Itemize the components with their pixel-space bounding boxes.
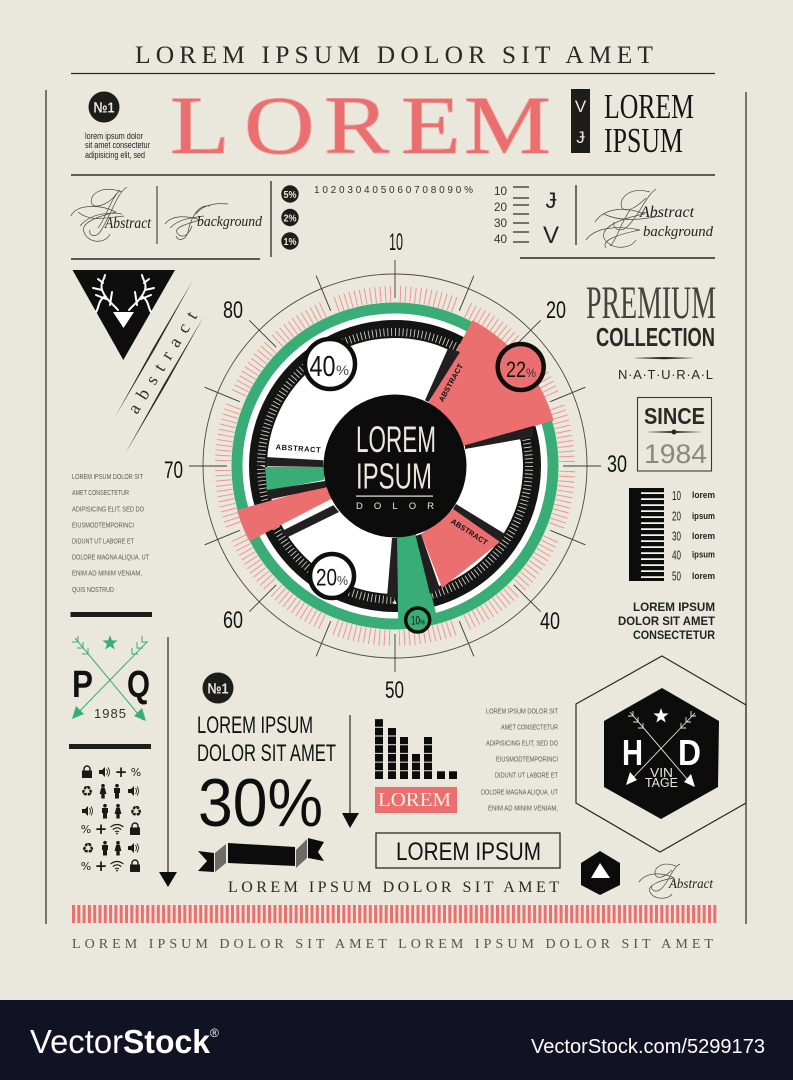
- percent badges: 1%: [284, 237, 297, 248]
- text block: lorem headline: DOLOR SIT AMET: [197, 740, 336, 767]
- barcode scale: 10: [672, 488, 681, 503]
- percent badge 40: 40: [310, 351, 336, 383]
- scale: 10 to 40: 10: [494, 184, 507, 198]
- script: abstract: [71, 187, 152, 241]
- boxed heading: [376, 833, 560, 868]
- center title: DOLOR: [356, 501, 434, 512]
- heading: lorem ipsum condensed serif: [604, 87, 694, 160]
- footer bar: VectorStock.com/5299173: [531, 1036, 765, 1058]
- frame lines: [46, 74, 746, 924]
- text block: right paragraph: ENIM AD MINIM VENIAM,: [488, 806, 558, 812]
- green segment left: [265, 467, 324, 491]
- scale: 10 to 40: 20: [494, 200, 507, 214]
- text block: lorem headline: LOREM IPSUM: [197, 712, 313, 739]
- dial labels: 60: [223, 607, 243, 634]
- heading: big lorem: LOREM: [170, 79, 551, 171]
- segment labels: ABSTRACT: [449, 517, 490, 547]
- badge: pq 1985: 1985: [94, 706, 126, 721]
- barcode scale: [629, 488, 715, 584]
- dial labels: 70: [164, 457, 183, 484]
- icon grid: %: [81, 860, 91, 873]
- divider bar left: [70, 612, 152, 617]
- percent badge 40: [305, 339, 355, 389]
- heading: big lorem: LOREM: [170, 79, 551, 171]
- icon grid: [81, 763, 142, 875]
- footer bar: Stock: [123, 1023, 211, 1060]
- text block: intro: lorem ipsum dolor: [85, 131, 143, 141]
- badge: pq 1985: P: [72, 664, 93, 706]
- heading: premium collection: N·A·T·U·R·A·L: [618, 367, 713, 382]
- percent badges: [281, 185, 299, 250]
- heading: lorem ipsum condensed serif: IPSUM: [604, 121, 683, 160]
- scale: 10 to 40: 30: [494, 216, 507, 230]
- pink tick ring: [223, 294, 567, 638]
- percent badge 20: [310, 554, 354, 598]
- percent badges: 5%: [284, 190, 297, 201]
- text block: right paragraph: EIUSMODTEMPORINCI: [496, 756, 558, 764]
- barcode scale: 50: [672, 568, 681, 584]
- stamp: since 1984: SINCE: [644, 403, 705, 429]
- ribbon: [198, 838, 324, 872]
- arrow: short down: [342, 715, 359, 828]
- badge: pq 1985: [72, 635, 150, 721]
- bar chart: [379, 719, 453, 779]
- icon grid: %: [81, 823, 91, 836]
- heading: lorem ipsum condensed serif: LOREM: [604, 87, 694, 126]
- barcode scale: lorem: [692, 571, 715, 581]
- red segment large: [395, 320, 554, 466]
- text block: right paragraph: LOREM IPSUM DOLOR SIT: [486, 708, 559, 716]
- segment labels: ABSTRACT: [437, 362, 465, 403]
- script: abstract background right: Abstract: [639, 204, 695, 221]
- diagonal abstract label: [115, 280, 204, 454]
- badge: pq 1985: Q: [127, 664, 150, 706]
- glyphs beside scale: Ɉ: [546, 188, 556, 213]
- scale: 10 to 40: [494, 184, 529, 246]
- text block: left paragraph: DIDUNT UT LABORE ET: [72, 538, 135, 546]
- pink stripe band: [72, 905, 717, 923]
- barcode scale: 20: [672, 508, 681, 524]
- text block: left paragraph: ADIPISICING ELIT, SED DO: [72, 506, 144, 514]
- heading: premium collection: [586, 277, 716, 382]
- badge: hexagon hd vintage: H: [622, 732, 643, 773]
- center title: IPSUM: [356, 456, 432, 497]
- percent badge 22: [498, 344, 544, 390]
- badge: hexagon hd vintage: D: [678, 732, 701, 773]
- icon grid: +: [115, 763, 127, 781]
- barcode scale: ipsum: [692, 511, 715, 521]
- dial labels: 30: [607, 451, 627, 478]
- scale: 10 to 40: 40: [494, 232, 507, 246]
- text block: intro: [85, 131, 150, 160]
- stamp: since 1984: [638, 398, 712, 471]
- text block: left paragraph: LOREM IPSUM DOLOR SIT: [72, 474, 144, 481]
- text block: intro: adipisicing elit, sed: [85, 150, 145, 160]
- script: abstract background right: [586, 189, 713, 248]
- green segment bottom: [397, 534, 437, 630]
- big percent: 30%: [198, 765, 323, 841]
- icon grid: %: [131, 766, 141, 779]
- barcode scale: 40: [672, 548, 681, 562]
- title: LOREM IPSUM DOLOR SIT AMET: [135, 40, 653, 69]
- text block: left paragraph: EIUSMODTEMPORINCI: [72, 522, 134, 530]
- text block: left paragraph: AMET CONSECTETUR: [72, 490, 129, 497]
- center title: [356, 419, 436, 512]
- green ring: [237, 308, 553, 624]
- text block: left paragraph: QUIS NOSTRUD: [72, 587, 114, 594]
- icon grid: ♻: [130, 804, 142, 820]
- dial labels: [164, 229, 627, 704]
- segment labels: [275, 362, 490, 547]
- footer bar: Vector: [30, 1023, 123, 1060]
- text block: left paragraph: ENIM AD MINIM VENIAM,: [72, 570, 142, 578]
- barcode scale: ipsum: [692, 550, 715, 560]
- script: background: background: [197, 214, 262, 230]
- badge: hexagon hd vintage: VIN: [650, 766, 673, 780]
- heading: premium collection: COLLECTION: [596, 322, 715, 352]
- barcode scale: lorem: [692, 531, 715, 541]
- icon: small hexagon triangle: [581, 851, 620, 895]
- script: abstract small: [639, 864, 714, 898]
- white disc: [242, 313, 548, 619]
- text block: left paragraph: [72, 474, 150, 594]
- script: abstract small: Abstract: [668, 877, 714, 892]
- black tick ring: [258, 329, 532, 603]
- icon grid: ♻: [82, 841, 94, 857]
- dial labels: 10: [389, 229, 403, 256]
- divider bar left lower: [69, 744, 151, 749]
- radial guide lines: [189, 260, 601, 672]
- percent badges: 2%: [284, 214, 297, 224]
- red segment lower right: [421, 509, 500, 588]
- glyphs beside scale: V: [543, 222, 559, 249]
- icon grid: +: [95, 857, 107, 875]
- text block: right paragraph: AMET CONSECTETUR: [501, 724, 558, 732]
- script: abstract background right: background: [643, 224, 713, 240]
- text block: right paragraph: [481, 708, 559, 812]
- segment labels: ABSTRACT: [275, 442, 321, 455]
- badge: number one lower: №1: [208, 680, 228, 698]
- text block: right paragraph: DOLORE MAGNA ALIQUA. UT: [481, 790, 559, 796]
- pink label: LOREM: [378, 789, 451, 811]
- dial labels: 50: [385, 677, 404, 704]
- center circle: [324, 394, 466, 538]
- text block: right caption: [618, 600, 716, 642]
- arrow: long down: [159, 637, 177, 887]
- center title: LOREM: [356, 419, 436, 460]
- text block: right paragraph: DIDUNT UT LABORE ET: [495, 772, 559, 780]
- badge: number one lower: [202, 672, 234, 704]
- text block: right paragraph: ADIPISICING ELIT, SED DO: [486, 740, 558, 748]
- dark tag: V: [575, 97, 587, 116]
- dial labels: 40: [540, 608, 560, 635]
- dial labels: 80: [223, 297, 243, 324]
- dark tag: [571, 89, 590, 153]
- footer bar: [0, 1000, 793, 1080]
- glyphs beside scale: [543, 188, 559, 249]
- tick ring gaps: [213, 284, 577, 648]
- diagonal abstract label: abstract: [123, 308, 201, 417]
- barcode scale: 30: [672, 528, 681, 544]
- percent badge 22: %: [526, 366, 536, 380]
- barcode scale: lorem: [692, 490, 715, 500]
- number strip: 102030405060708090%: [314, 185, 473, 196]
- script: abstract: Abstract: [104, 215, 152, 232]
- percent badge 10: [406, 608, 430, 632]
- dial labels: 20: [546, 297, 566, 324]
- badge: number one top: №1: [94, 100, 114, 116]
- percent badge 10: %: [420, 620, 425, 626]
- circular chart: [189, 260, 601, 672]
- red segment left: [237, 466, 395, 541]
- boxed heading: LOREM IPSUM: [396, 838, 541, 866]
- percent badge 10: 10: [411, 614, 420, 628]
- text block: right caption: CONSECTETUR: [633, 628, 715, 642]
- text block: lorem headline: [197, 712, 336, 767]
- script: background: [165, 204, 262, 239]
- icon grid: ♻: [81, 784, 93, 800]
- text block: right caption: LOREM IPSUM: [633, 600, 715, 614]
- outer thin ring: [203, 274, 587, 658]
- icon: deer triangle: [72, 270, 175, 360]
- dark spokes: [265, 348, 533, 597]
- percent badge 20: 20: [316, 564, 337, 592]
- stamp: since 1984: 1984: [644, 439, 707, 469]
- badge: number one top: [88, 92, 120, 122]
- percent badge 20: %: [337, 573, 348, 588]
- text block: left paragraph: DOLORE MAGNA ALIQUA. UT: [72, 554, 150, 562]
- subheading bottom: LOREM IPSUM DOLOR SIT AMET: [228, 879, 559, 896]
- text block: intro: sit amet consectetur: [85, 140, 150, 150]
- bottom caption: LOREM IPSUM DOLOR SIT AMET LOREM IPSUM DOLOR SIT AMET: [72, 937, 713, 952]
- badge: hexagon hd vintage: [576, 656, 746, 852]
- icon grid: +: [95, 820, 107, 838]
- footer bar: ®: [210, 1026, 219, 1040]
- text block: right caption: DOLOR SIT AMET: [618, 614, 716, 628]
- percent badge 22: 22: [506, 357, 526, 382]
- percent badge 40: %: [336, 362, 349, 378]
- badge: hexagon hd vintage: TAGE: [645, 776, 678, 790]
- dark tag: Ɉ: [576, 128, 585, 147]
